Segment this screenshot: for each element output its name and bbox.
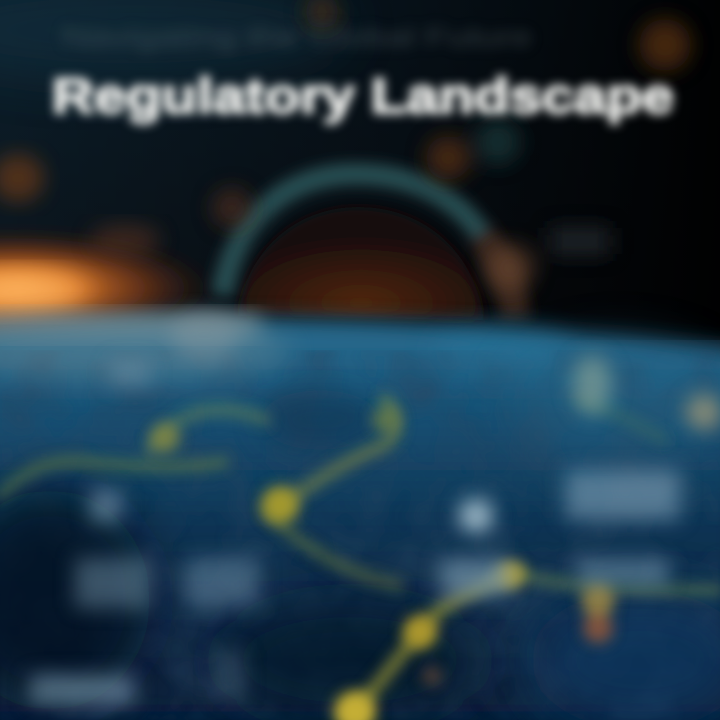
earth surface bbox=[0, 309, 720, 720]
yellow-green network routes bbox=[0, 400, 720, 715]
pale data labels on the map bbox=[30, 355, 720, 705]
dark planet disc behind the arc bbox=[238, 207, 484, 320]
subtitle: Navigating the Global Future bbox=[62, 22, 532, 52]
teal arc around the disc bbox=[222, 174, 516, 320]
warm nodes on the arc bbox=[212, 0, 691, 292]
title bbox=[52, 22, 674, 124]
heading: Regulatory Landscape bbox=[52, 68, 674, 124]
sunrise glow on the horizon bbox=[0, 154, 215, 346]
route junction nodes bbox=[150, 407, 615, 720]
